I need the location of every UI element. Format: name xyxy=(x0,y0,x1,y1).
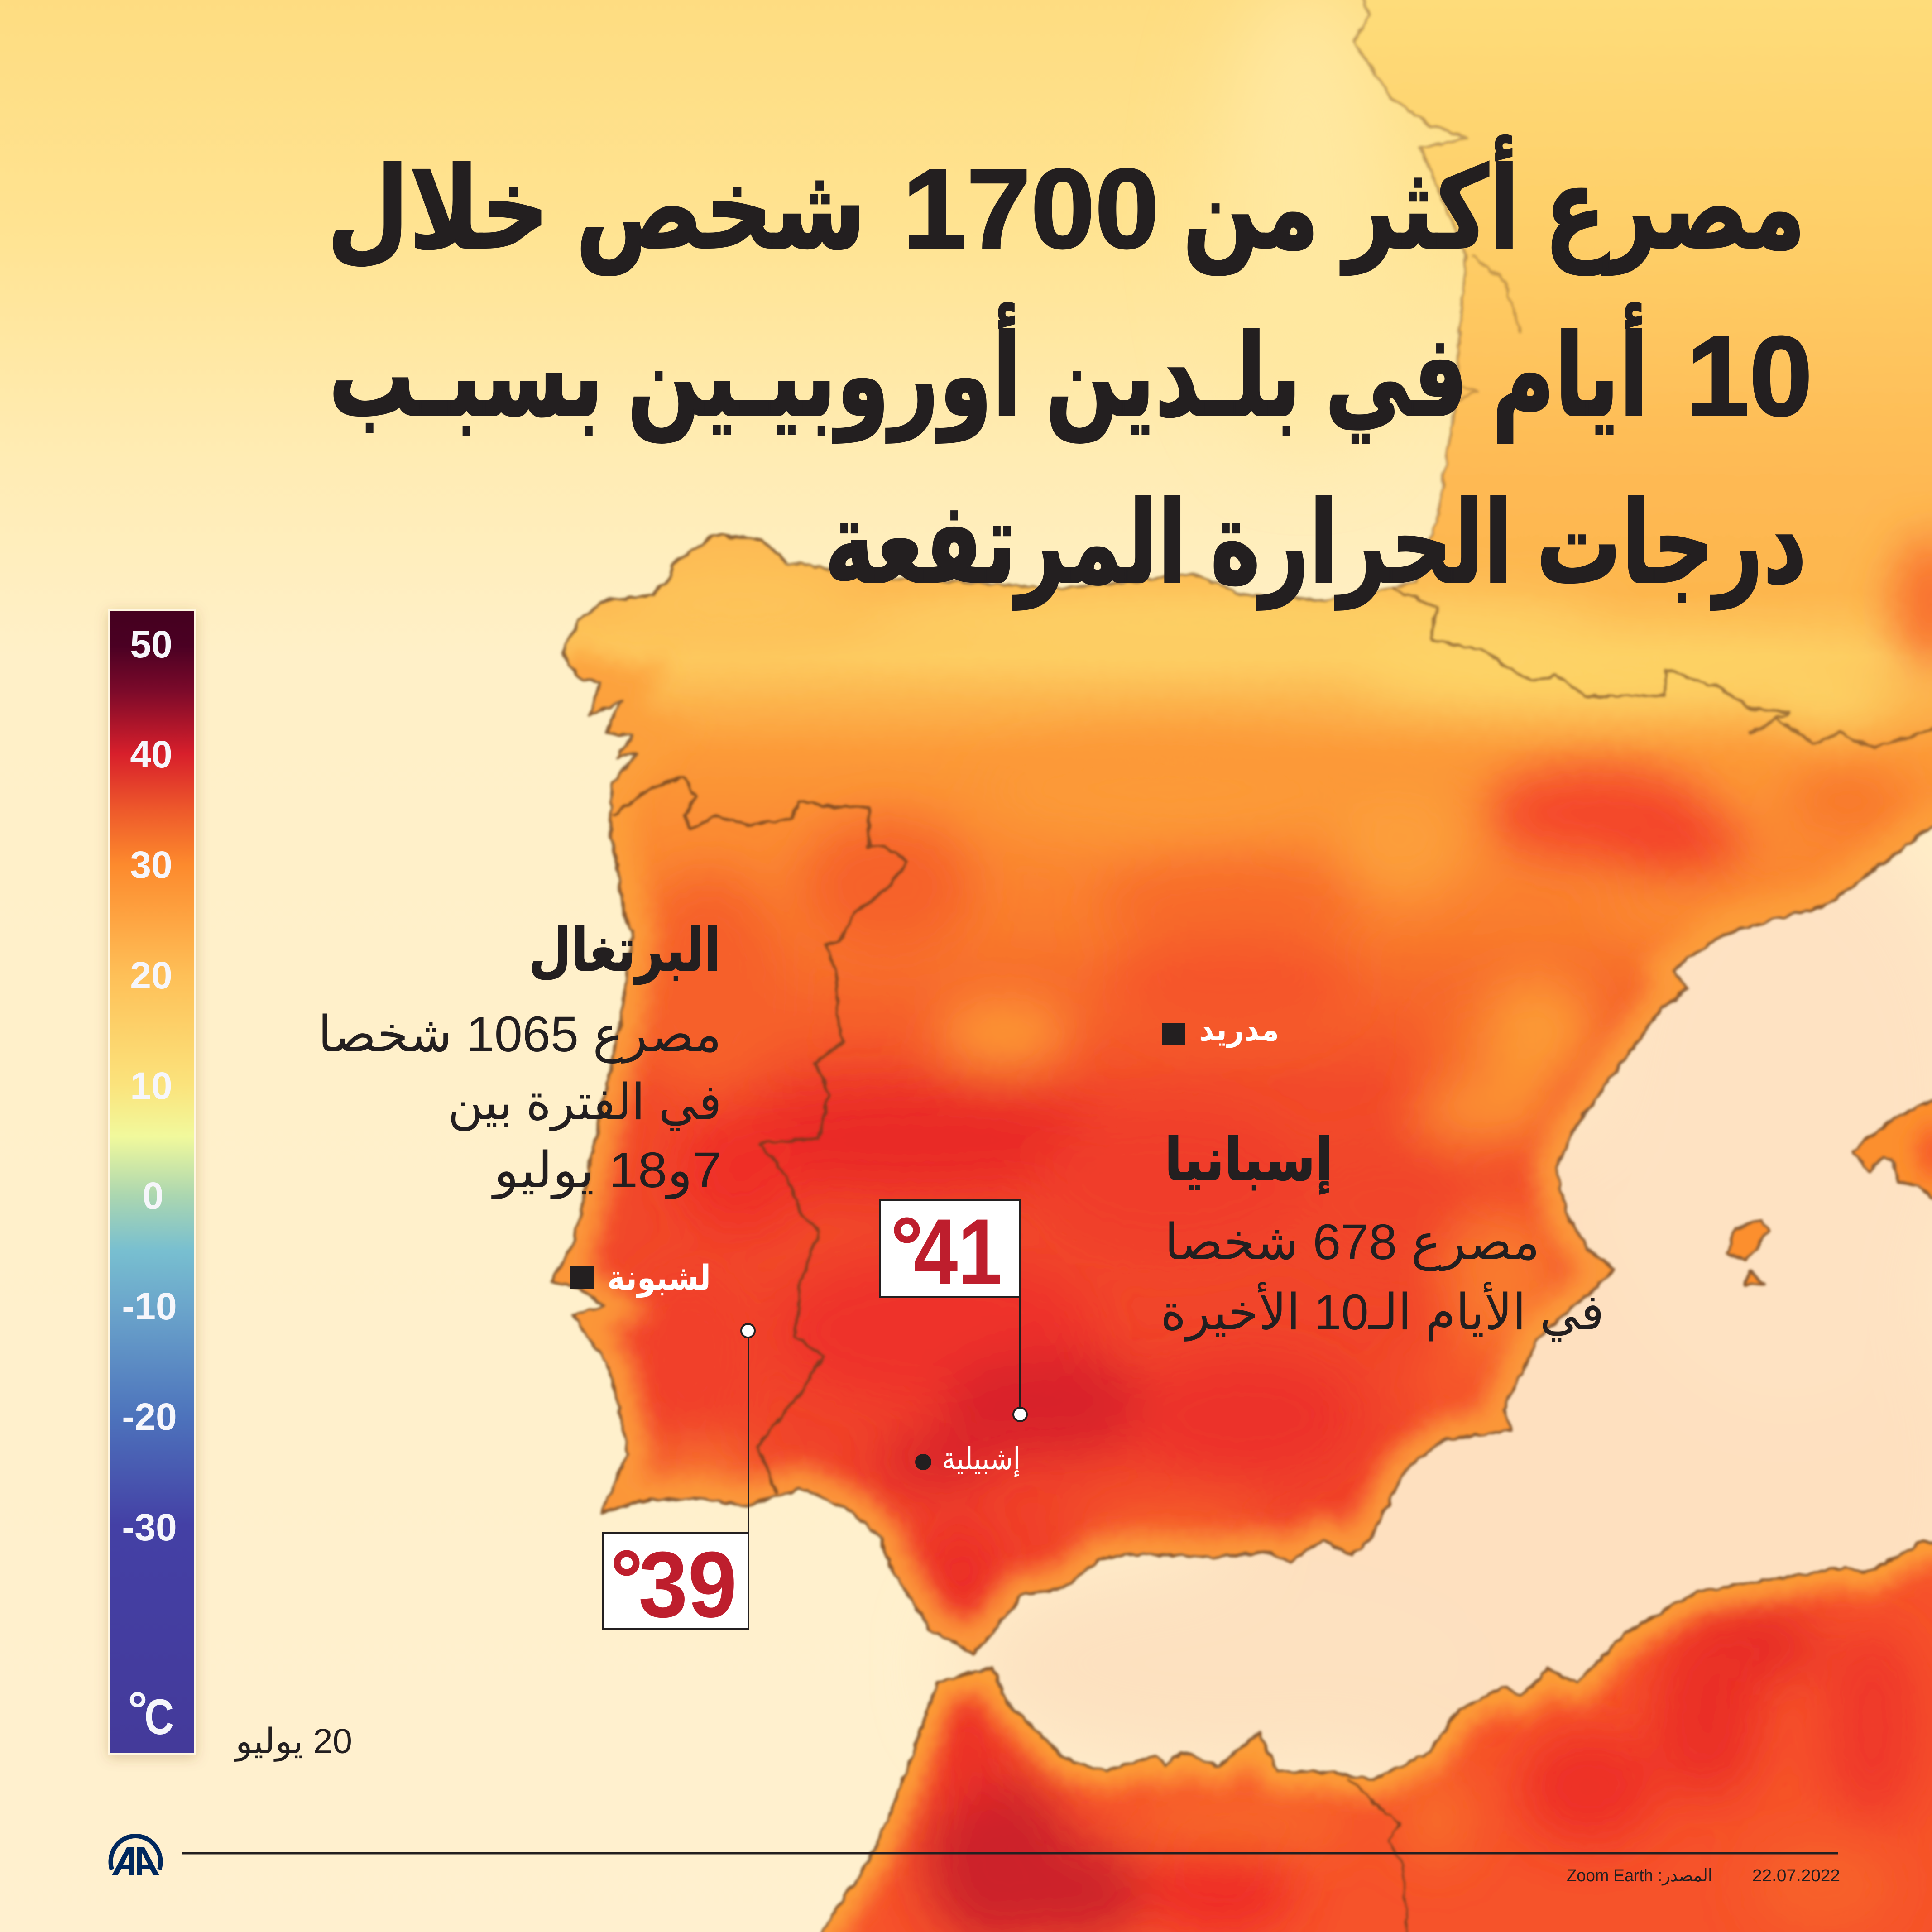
portugal info block: البرتغال xyxy=(529,917,721,985)
portugal info block: مصرع 1065 شخصا xyxy=(318,1007,722,1064)
portugal info block xyxy=(318,917,722,1199)
temperature colour scale legend: 20 xyxy=(130,954,173,997)
title xyxy=(327,135,1812,610)
temperature colour scale legend: ° xyxy=(128,1682,148,1738)
seville marker xyxy=(915,1442,1021,1477)
spain info block xyxy=(1160,1127,1604,1342)
title: 1700 xyxy=(902,145,1159,272)
callout: 39 degrees xyxy=(603,1324,755,1637)
coastlines and borders xyxy=(552,0,1932,1932)
footer rule xyxy=(182,1852,1838,1855)
portugal info block: في الفترة بين xyxy=(448,1074,722,1131)
callout: 41 degrees xyxy=(880,1199,1027,1421)
lisbon marker: لشبونة xyxy=(607,1259,711,1298)
seville marker: إشبيلية xyxy=(942,1442,1021,1477)
publication date: 22.07.2022 xyxy=(1752,1866,1840,1885)
callout: 39 degrees: 39 xyxy=(638,1532,737,1637)
temperature colour scale legend: -20 xyxy=(122,1395,177,1438)
callout: 41 degrees: 41 xyxy=(914,1199,1002,1304)
temperature colour scale legend: 10 xyxy=(130,1064,173,1107)
temperature colour scale legend: 0 xyxy=(143,1175,163,1217)
spain info block: في الأيام الـ10 الأخيرة xyxy=(1160,1281,1604,1342)
title: شخص خلال xyxy=(327,145,866,275)
temperature colour scale legend: -30 xyxy=(122,1506,177,1548)
madrid marker: مدريد xyxy=(1199,1012,1279,1048)
temperature colour scale legend: 50 xyxy=(130,623,173,666)
temperature colour scale legend xyxy=(108,609,196,1755)
title: 10 xyxy=(1686,313,1812,439)
map date: 20 يوليو xyxy=(234,1722,352,1762)
source credit: المصدر: Zoom Earth xyxy=(1567,1866,1712,1885)
logo: AA xyxy=(110,1836,160,1875)
portugal info block: 7و18 يوليو xyxy=(491,1142,722,1199)
lisbon marker xyxy=(570,1259,711,1298)
temperature colour scale legend: 30 xyxy=(130,844,173,886)
temperature colour scale legend: C xyxy=(144,1689,174,1745)
madrid marker xyxy=(1162,1012,1279,1048)
temperature colour scale legend: -10 xyxy=(122,1285,177,1328)
spain info block: إسبانيا xyxy=(1165,1127,1333,1194)
temperature colour scale legend: 40 xyxy=(130,733,173,776)
spain info block: مصرع 678 شخصا xyxy=(1165,1214,1540,1271)
